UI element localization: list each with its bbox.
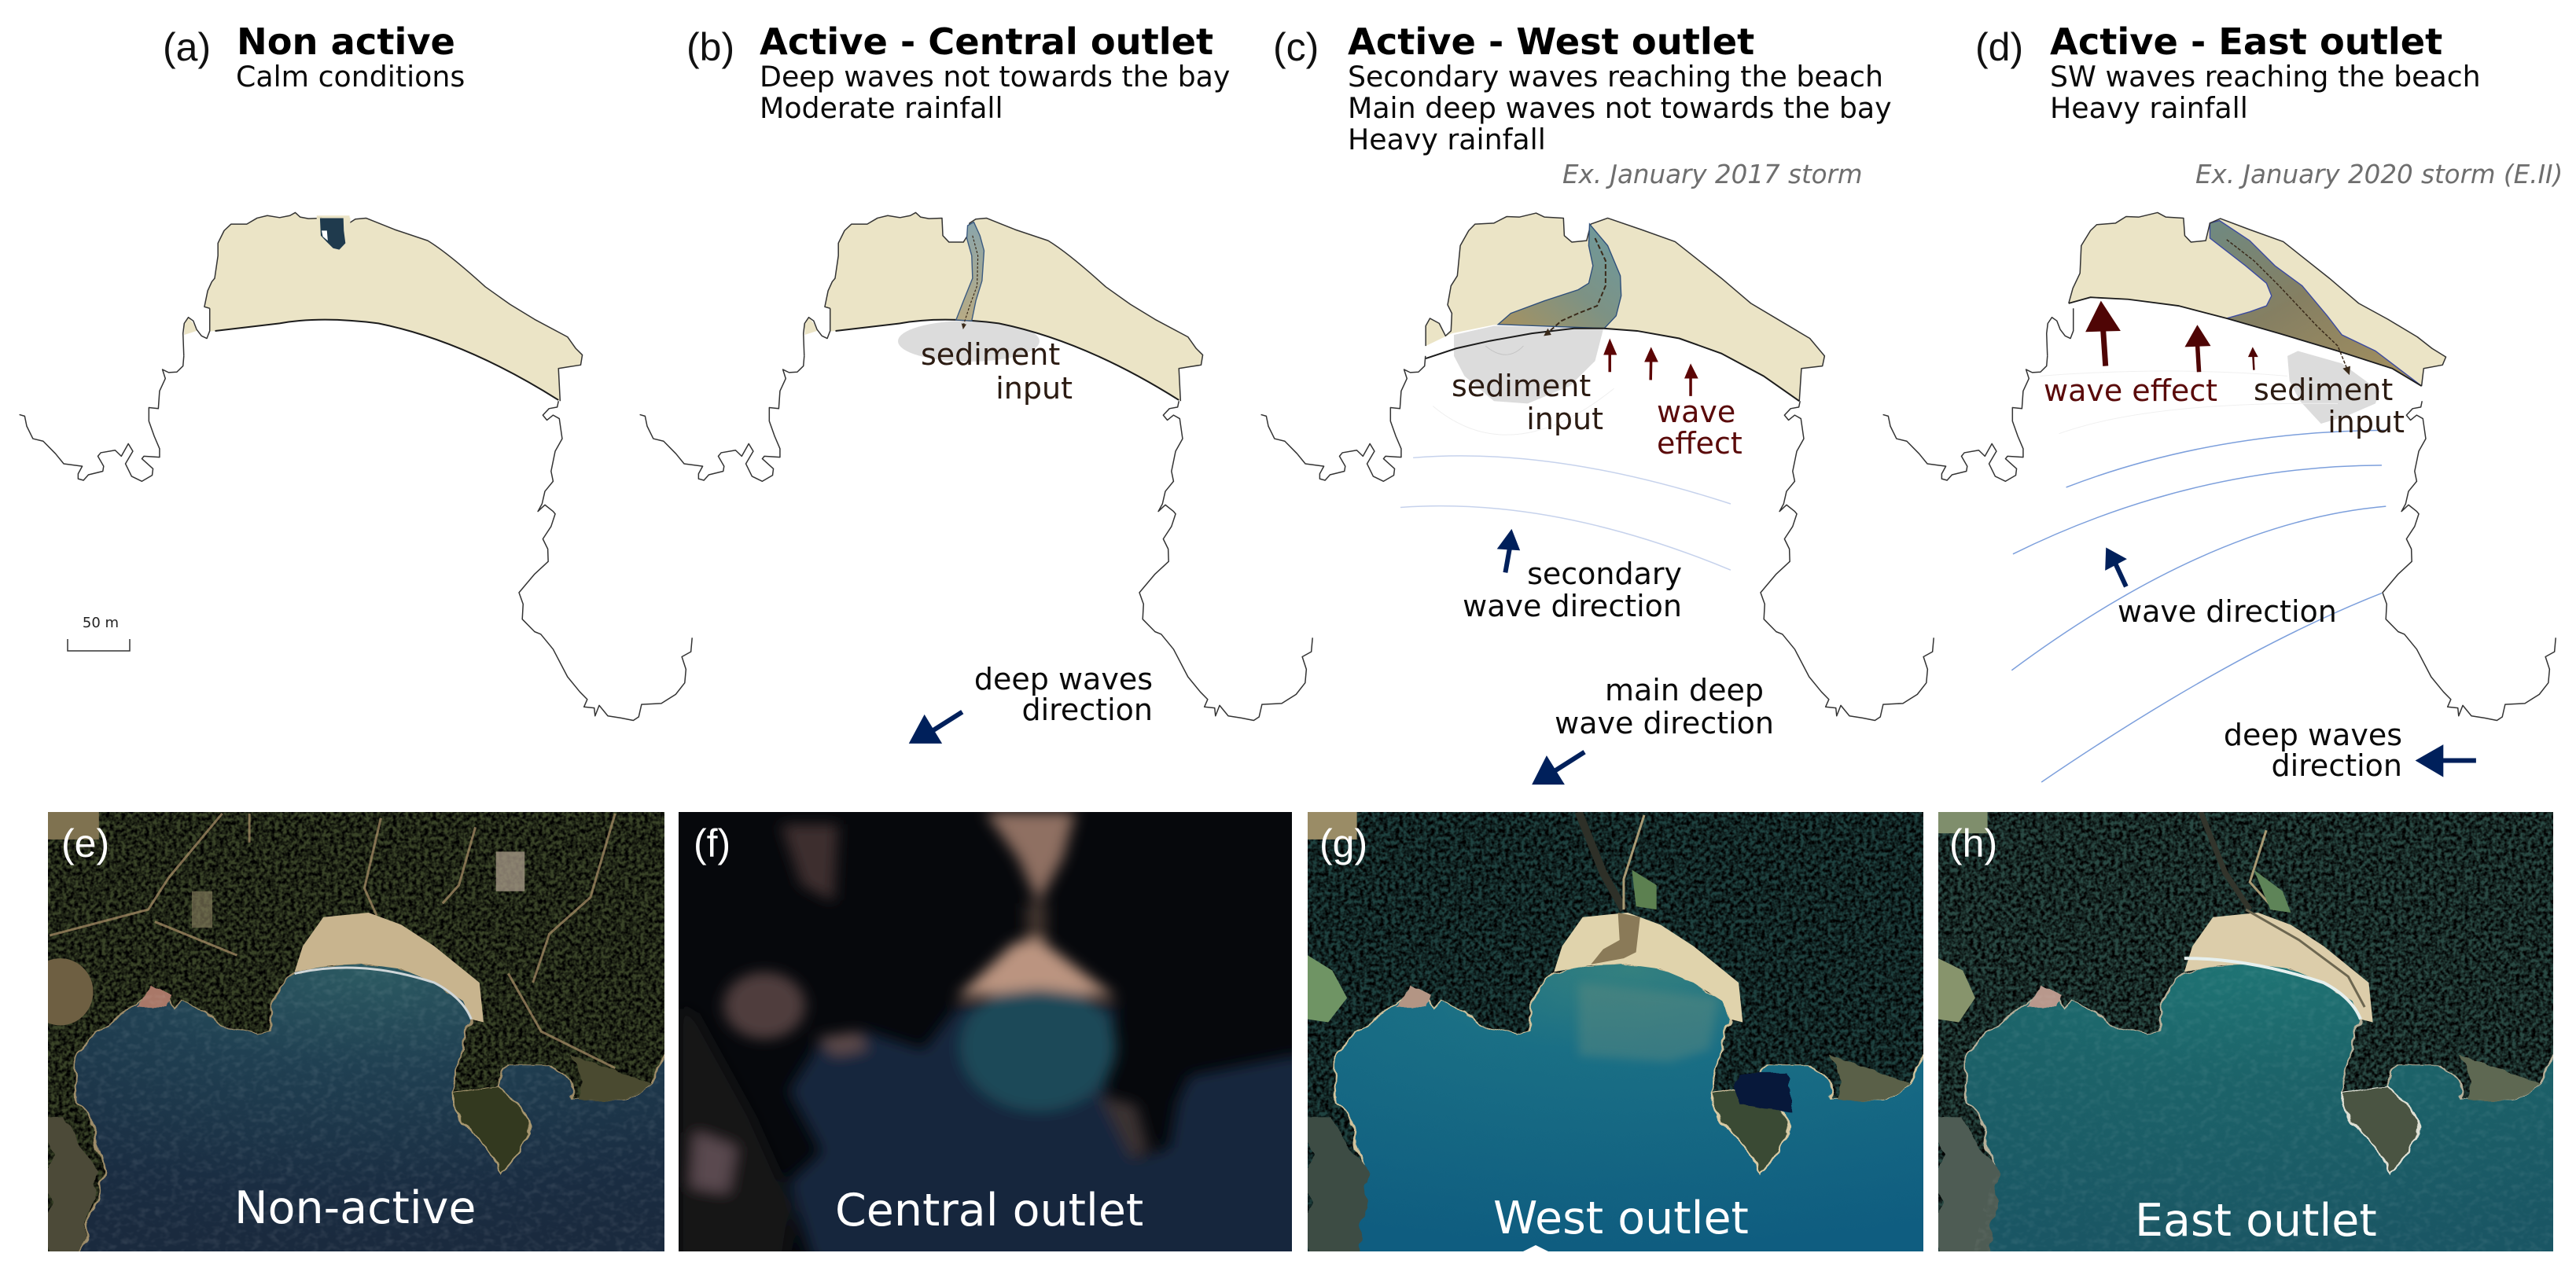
heading: Active - East outlet: Active - East outlet [2050, 20, 2442, 63]
label: main deep wave direction: wave direction [1555, 706, 1774, 740]
label: wave effect: wave [1657, 395, 1735, 429]
label: secondary wave direction [1463, 557, 1682, 623]
subheading lines: Main deep waves not towards the bay [1348, 91, 1892, 125]
beach map with east channel [2069, 212, 2446, 424]
subheading lines [1348, 60, 1892, 156]
beach map with pond [20, 212, 692, 721]
label: sediment input: sediment [921, 337, 1060, 372]
label: wave effect [1657, 395, 1742, 461]
arrows: wave effect [1603, 339, 1698, 396]
subheading lines [760, 60, 1230, 125]
label: sediment input [1452, 369, 1603, 436]
label: secondary wave direction: secondary [1527, 557, 1682, 591]
panel letter c: (c) [1273, 25, 1319, 69]
label: deep waves direction: direction [1021, 693, 1153, 727]
panel c: active west outlet [1261, 20, 1934, 784]
arrows: wave effect [2085, 301, 2258, 372]
label: deep waves direction: deep waves [2224, 718, 2402, 752]
panel letter b: (b) [686, 25, 734, 69]
arrow: secondary wave direction [1497, 529, 1520, 572]
label: sediment input: sediment [1452, 369, 1591, 403]
label: sediment input [2254, 373, 2405, 439]
label: main deep wave direction: main deep [1605, 673, 1764, 707]
central outlet channel [956, 222, 984, 329]
photo caption West outlet: West outlet [1493, 1192, 1749, 1244]
label: wave direction: wave direction [2118, 594, 2337, 629]
wave crests [2011, 371, 2388, 782]
photo e: non-active aerial [48, 812, 664, 1251]
photo letter h: (h) [1949, 821, 1997, 865]
scale bar 50 m: 50 m [83, 615, 119, 631]
coast lines [1883, 308, 2556, 721]
panel d: active east outlet [1883, 20, 2563, 783]
panel a: non active [20, 20, 692, 721]
label: wave effect: wave effect [2044, 373, 2217, 408]
photo letter g: (g) [1319, 821, 1367, 865]
photo caption East outlet: East outlet [2135, 1195, 2377, 1247]
label: wave effect: effect [1657, 426, 1742, 461]
label: main deep wave direction [1555, 673, 1774, 740]
sediment plume [898, 321, 1040, 362]
aerial image f [679, 812, 1325, 1263]
heading: Non active: Non active [237, 20, 455, 63]
label: sediment input: sediment [2254, 373, 2393, 407]
label: deep waves direction: direction [2271, 748, 2402, 783]
panel letter a: (a) [163, 25, 211, 69]
subheading lines [2050, 60, 2481, 125]
photo letter f: (f) [694, 821, 730, 865]
aerial image g [1308, 812, 1956, 1263]
subheading: Calm conditions [236, 60, 465, 94]
subheading lines: Heavy rainfall [2050, 91, 2248, 125]
photo g: west outlet aerial [1308, 812, 1956, 1263]
panel letter d: (d) [1975, 25, 2023, 69]
photo f: central outlet aerial [679, 812, 1325, 1263]
panel b: active central outlet [640, 20, 1312, 744]
photo h: east outlet aerial [1938, 812, 2576, 1263]
scale bar 50 m [68, 615, 130, 651]
photo caption Central outlet: Central outlet [835, 1185, 1143, 1236]
label: sediment input: input [2328, 405, 2405, 439]
wave crests [1400, 456, 1731, 570]
label: sediment input: input [995, 371, 1073, 406]
subheading lines: SW waves reaching the beach [2050, 60, 2481, 94]
arrow: wave direction [2105, 547, 2127, 586]
white notch at lower edge [1523, 1245, 1548, 1251]
example storm note: Ex. January 2020 storm (E.II) [2195, 160, 2563, 189]
subheading lines: Heavy rainfall [1348, 123, 1546, 156]
label: sediment input [921, 337, 1073, 406]
subheading lines: Moderate rainfall [760, 91, 1003, 125]
heading: Active - West outlet: Active - West outlet [1348, 20, 1754, 63]
coast lines [1261, 356, 1934, 721]
aerial image e [48, 812, 664, 1251]
arrow: main deep wave direction [1532, 752, 1584, 784]
photo letter e: (e) [61, 821, 109, 865]
label: sediment input: input [1526, 402, 1603, 436]
label: deep waves direction: deep waves [974, 662, 1153, 696]
example storm note: Ex. January 2017 storm [1562, 160, 1863, 189]
label: secondary wave direction: wave direction [1463, 589, 1682, 623]
subheading lines: Deep waves not towards the bay [760, 60, 1230, 94]
photo caption Non-active: Non-active [234, 1182, 476, 1234]
beach map with west channel [1426, 213, 1824, 435]
label: deep waves direction [974, 662, 1153, 727]
arrow: deep waves direction [2416, 744, 2476, 777]
subheading lines: Secondary waves reaching the beach [1348, 60, 1883, 94]
arrow: deep waves direction [909, 712, 962, 744]
beach map with central channel [640, 212, 1312, 721]
heading: Active - Central outlet: Active - Central outlet [760, 20, 1213, 63]
aerial image h [1938, 812, 2576, 1263]
label: deep waves direction [2224, 718, 2402, 783]
